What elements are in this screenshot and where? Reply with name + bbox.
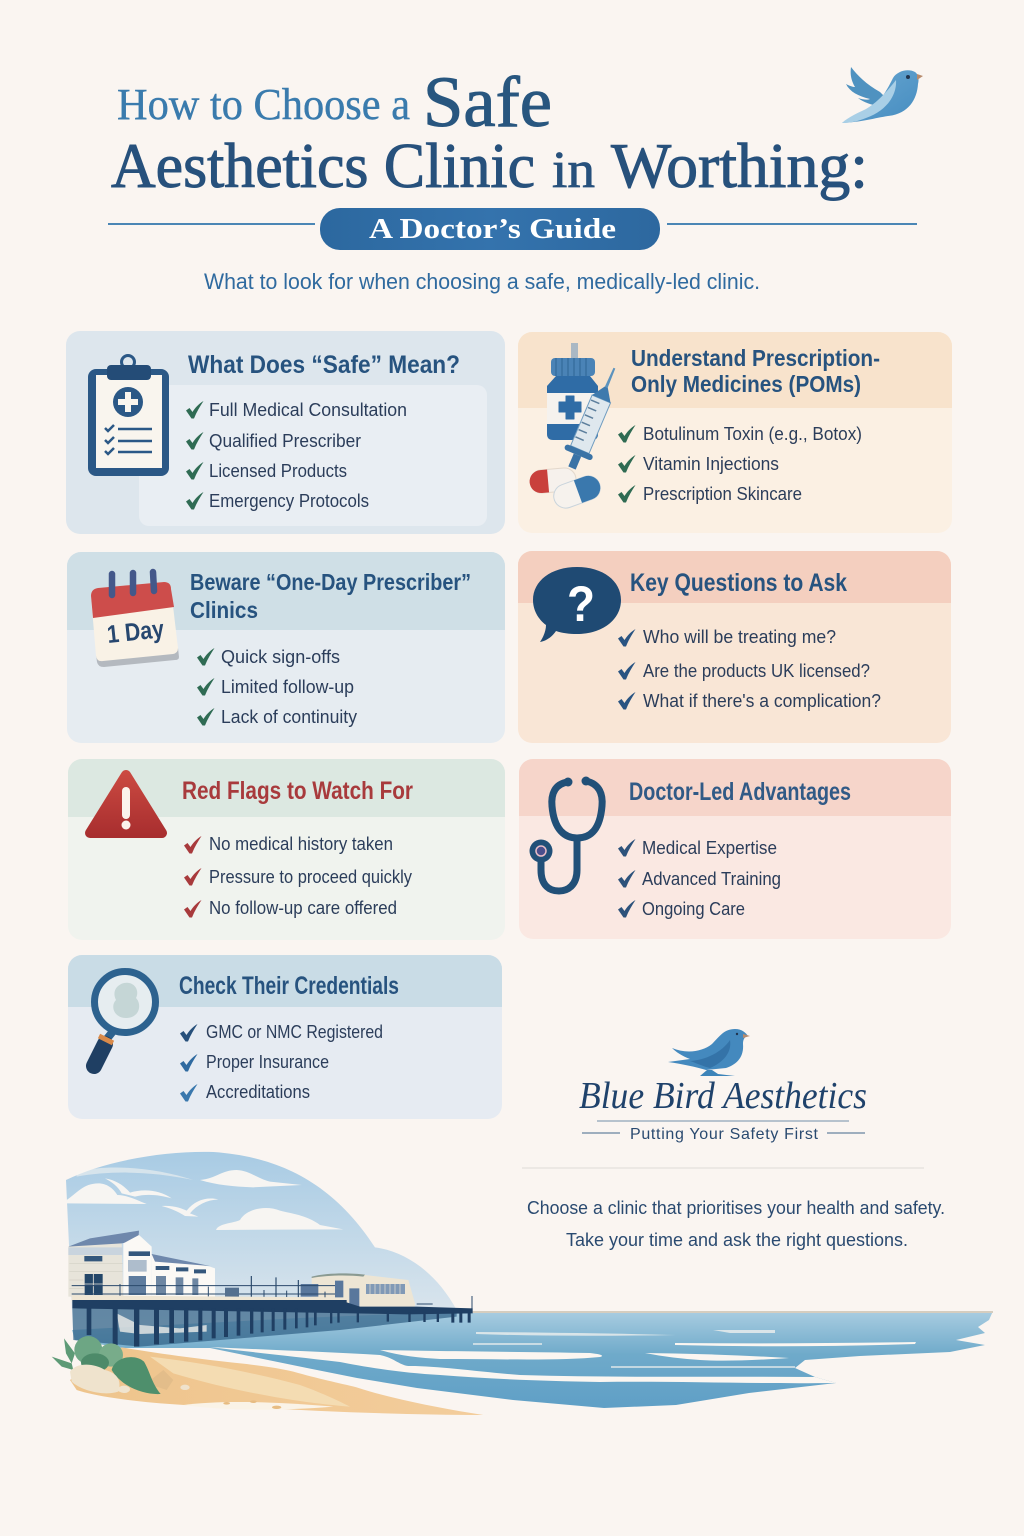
title: in [552,142,595,199]
subtitle ribbon: A Doctor's Guide: A Doctor’s Guide [369,213,616,245]
icon: question speech bubble [533,567,621,642]
heading: Check Their Credentials [179,972,399,1000]
checklist: No follow-up care offered [209,897,397,918]
checklist: No medical history taken [209,833,393,854]
illustration: Worthing pier and beach [52,1152,993,1415]
panel: key questions [518,551,951,743]
heading: Red Flags to Watch For [182,777,413,805]
checklist: Quick sign-offs [221,646,340,667]
checklist: Prescription Skincare [643,483,802,504]
title: How to Choose a [117,80,410,129]
title: Worthing: [611,130,868,201]
checklist: What if there's a complication? [643,690,881,711]
pier deck and piles [72,1295,473,1347]
checklist [184,833,413,918]
checklist [180,1021,383,1102]
checklist: Who will be treating me? [643,626,836,647]
checklist: Pressure to proceed quickly [209,866,413,887]
surf stripes [210,1330,916,1383]
icon: clipboard [88,356,169,476]
heading: Key Questions to Ask [630,569,847,597]
checklist: Proper Insurance [206,1051,329,1072]
icon: blue bird top right [842,67,923,123]
logo tagline: Putting Your Safety First [630,1126,819,1143]
icon: medicine bottle, syringe and pills [529,343,628,511]
heading: What Does “Safe” Mean? [188,351,460,379]
subtitle ribbon: A Doctor's Guide [108,208,917,250]
panel: red flags [68,759,505,940]
panel: one-day prescriber clinics [67,552,505,743]
checklist [618,626,881,711]
horizon [472,1311,993,1313]
checklist [197,646,358,727]
closing message: Choose a clinic that prioritises your health and safety. [527,1197,945,1218]
shrubs [52,1336,161,1394]
end pavilion [301,1273,415,1307]
checklist: Botulinum Toxin (e.g., Botox) [643,423,862,444]
sea [72,1311,993,1408]
checklist: Full Medical Consultation [209,399,407,420]
main pavilion [68,1231,215,1297]
heading [631,345,880,397]
icon: warning triangle [90,775,162,833]
sand [70,1347,483,1415]
icon: question speech bubble: ? [567,576,595,632]
icon: stethoscope [530,776,602,891]
intro line: What to look for when choosing a safe, medically-led clinic. [204,269,760,294]
heading: Only Medicines (POMs) [631,371,861,397]
icon: calendar [91,572,179,667]
checklist: Ongoing Care [642,898,745,919]
sky, clouds and buildings [66,1152,472,1340]
icon: magnifying glass [94,972,156,1066]
checklist: Are the products UK licensed? [643,660,870,681]
rocks [70,1365,130,1393]
title: Safe [423,62,552,142]
heading: Understand Prescription- [631,345,880,371]
logo wordmark: Blue Bird Aesthetics [579,1075,867,1117]
pier railing and lamps [72,1276,472,1310]
checklist: Medical Expertise [642,837,777,858]
checklist: Qualified Prescriber [209,430,361,451]
heading: Clinics [190,597,258,623]
heading [190,569,471,623]
clouds and gulls [67,1168,343,1230]
title: Aesthetics Clinic [111,130,535,201]
title [111,62,868,201]
logo: Blue Bird Aesthetics [579,1029,867,1143]
checklist: Accreditations [206,1081,310,1102]
checklist [186,399,407,511]
icon: calendar: 1 Day [106,615,165,649]
sky [66,1152,457,1340]
heading: Beware “One-Day Prescriber” [190,569,471,595]
heading: Doctor-Led Advantages [629,778,851,806]
beach, shrubs and rocks [52,1336,483,1415]
panel: doctor-led advantages [519,759,951,939]
checklist: Vitamin Injections [643,453,779,474]
panel: prescription-only medicines [518,332,952,533]
closing message: Take your time and ask the right questions. [566,1229,908,1250]
checklist [618,423,862,504]
checklist: Advanced Training [642,868,781,889]
panel: what does safe mean [66,331,505,534]
checklist: Lack of continuity [221,706,358,727]
closing message [527,1197,945,1250]
panel: check credentials [68,955,502,1119]
checklist [618,837,781,919]
icon: logo bird [668,1029,750,1076]
checklist: GMC or NMC Registered [206,1021,383,1042]
checklist: Licensed Products [209,460,347,481]
checklist: Emergency Protocols [209,490,369,511]
checklist: Limited follow-up [221,676,354,697]
